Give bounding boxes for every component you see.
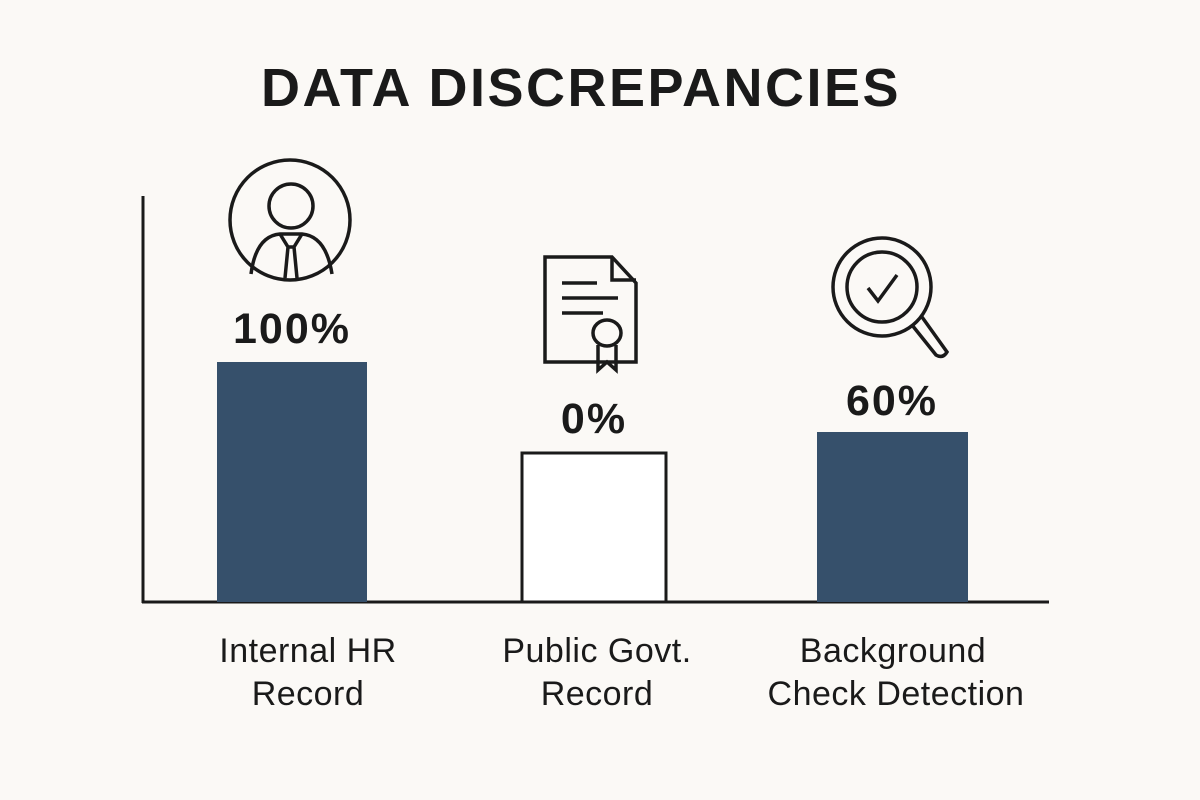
icon: magnifier with check bbox=[833, 238, 947, 356]
bar: public govt record bbox=[522, 453, 666, 602]
category label: public govt record: Public Govt. bbox=[502, 632, 692, 670]
bar: internal HR record bbox=[217, 362, 367, 602]
value label 100%: 100% bbox=[233, 305, 351, 353]
icon: document with seal bbox=[545, 257, 636, 370]
category label: internal HR record: Internal HR bbox=[219, 632, 397, 670]
category label: internal HR record: Record bbox=[252, 675, 364, 713]
title: DATA DISCREPANCIES bbox=[261, 58, 901, 118]
icon: person bbox=[230, 160, 350, 280]
value label 0%: 0% bbox=[561, 395, 627, 443]
value label 60%: 60% bbox=[846, 377, 938, 425]
chart axes bbox=[142, 196, 1049, 603]
category label: background check detection: Background bbox=[800, 632, 986, 670]
category label: background check detection: Check Detection bbox=[768, 675, 1024, 713]
bar: background check detection bbox=[817, 432, 968, 602]
category label: public govt record: Record bbox=[541, 675, 653, 713]
